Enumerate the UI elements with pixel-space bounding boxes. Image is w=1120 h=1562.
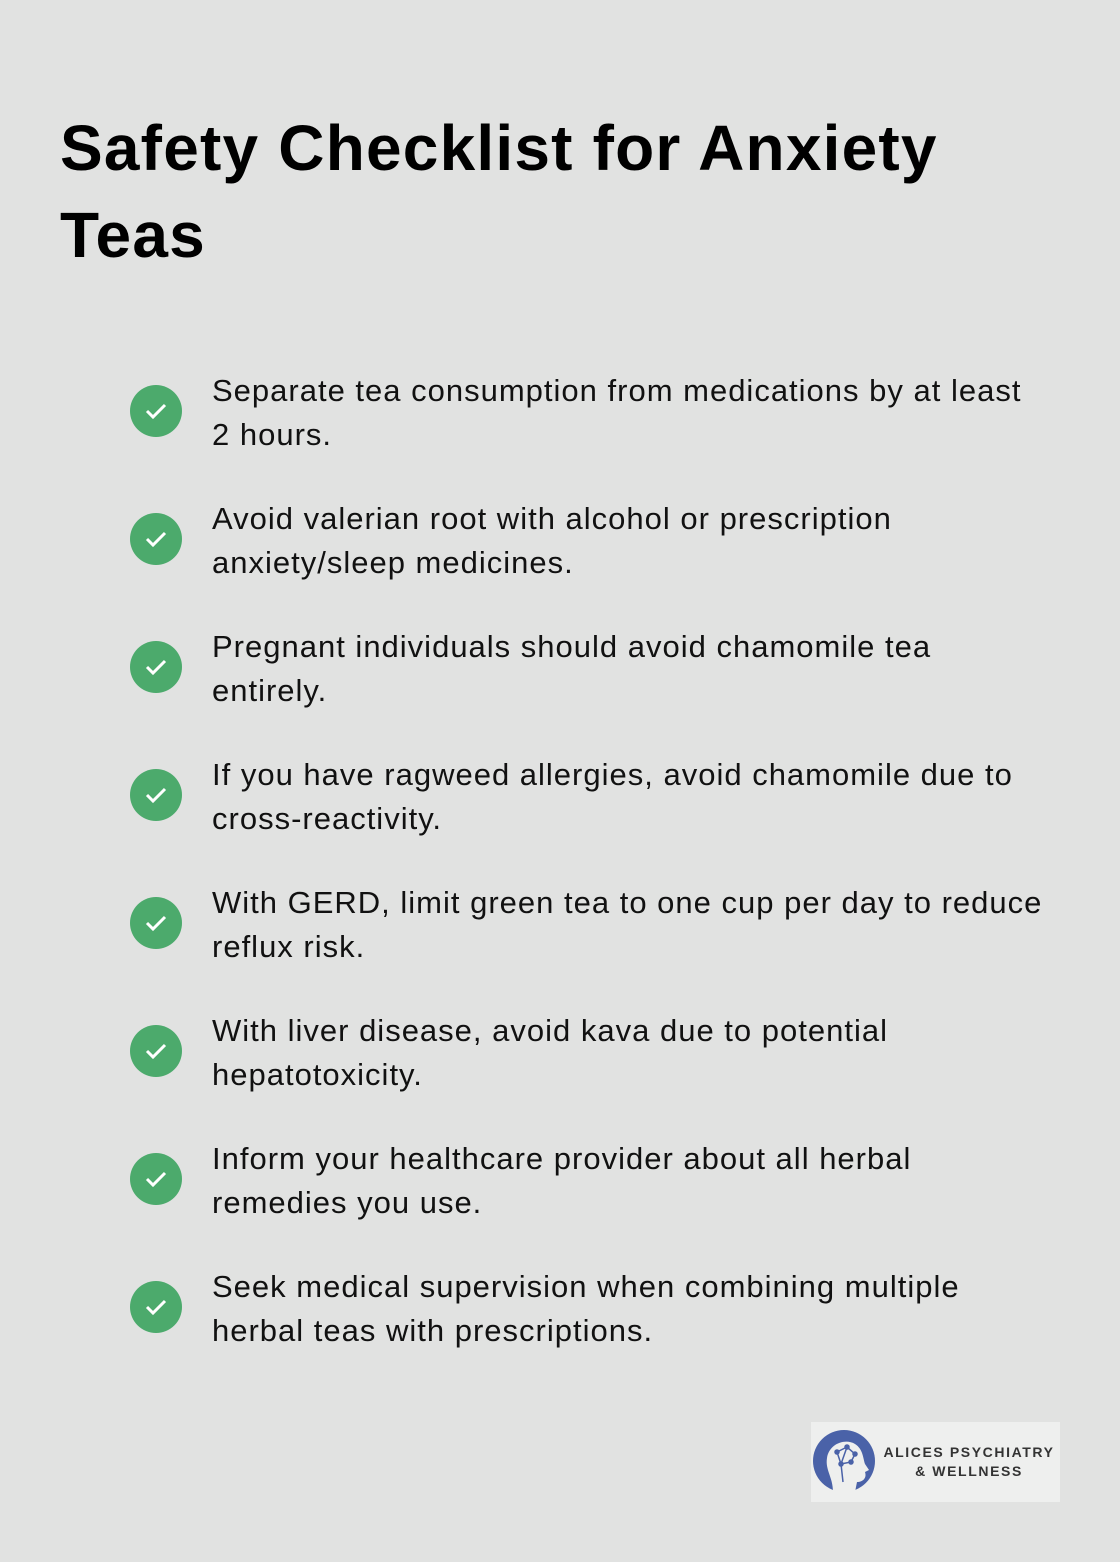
- title: Safety Checklist for Anxiety: [60, 112, 938, 184]
- item 1: 2 hours.: [212, 417, 332, 452]
- item 5: [130, 885, 1042, 964]
- item 3: Pregnant individuals should avoid chamomile tea: [212, 629, 931, 664]
- item 7: remedies you use.: [212, 1185, 482, 1220]
- item 2: [130, 501, 892, 580]
- item 3: [130, 629, 931, 708]
- title: [60, 112, 938, 271]
- item 6: [130, 1013, 888, 1092]
- item 8: Seek medical supervision when combining multiple: [212, 1269, 960, 1304]
- item 4: If you have ragweed allergies, avoid chamomile due to: [212, 757, 1013, 792]
- item 6: hepatotoxicity.: [212, 1057, 423, 1092]
- item 7: Inform your healthcare provider about all herbal: [212, 1141, 911, 1176]
- item 2: anxiety/sleep medicines.: [212, 545, 574, 580]
- title: Teas: [60, 199, 206, 271]
- item 2: Avoid valerian root with alcohol or prescription: [212, 501, 892, 536]
- item 5: With GERD, limit green tea to one cup per day to reduce: [212, 885, 1042, 920]
- item 4: [130, 757, 1013, 836]
- logo: & WELLNESS: [915, 1463, 1023, 1479]
- item 1: [130, 373, 1021, 452]
- item 8: herbal teas with prescriptions.: [212, 1313, 653, 1348]
- item 8: [130, 1269, 960, 1348]
- item 5: reflux risk.: [212, 929, 365, 964]
- item 3: entirely.: [212, 673, 327, 708]
- item 7: [130, 1141, 911, 1220]
- logo: ALICES PSYCHIATRY: [883, 1444, 1055, 1460]
- item 1: Separate tea consumption from medications by at least: [212, 373, 1021, 408]
- item 4: cross-reactivity.: [212, 801, 442, 836]
- logo: [811, 1422, 1060, 1502]
- item 6: With liver disease, avoid kava due to potential: [212, 1013, 888, 1048]
